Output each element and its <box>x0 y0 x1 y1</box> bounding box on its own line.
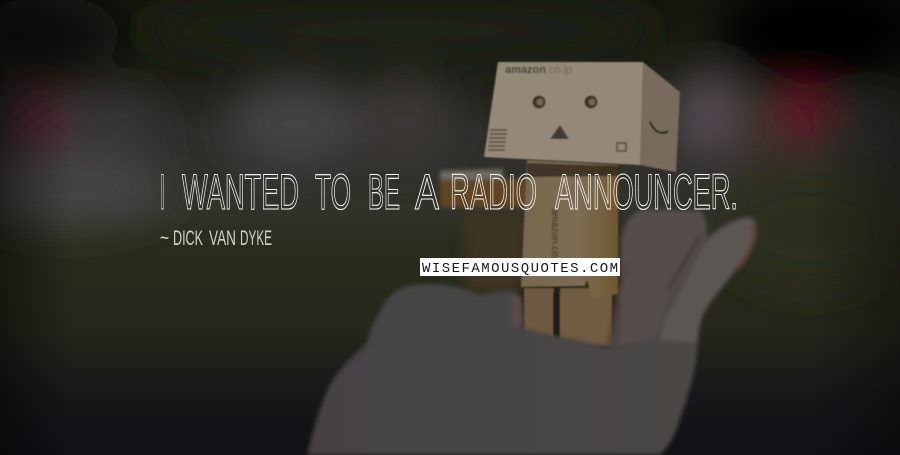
author: DYKE <box>240 227 272 250</box>
quote text: WANTED <box>182 164 299 220</box>
quote text: BE <box>368 164 400 220</box>
smile logo on side <box>650 122 668 133</box>
quote text: I <box>160 164 165 220</box>
robot arm <box>440 169 530 208</box>
author: VAN <box>209 227 236 250</box>
quote text: TO <box>315 164 351 220</box>
author: DICK <box>173 227 203 250</box>
quote text: A <box>415 164 439 220</box>
robot legs <box>524 288 612 346</box>
hand <box>307 209 756 455</box>
robot head <box>484 62 680 172</box>
author: ~ <box>160 227 169 250</box>
amazon logo on head: amazon.co.jp <box>505 64 572 76</box>
quote text: ANNOUNCER. <box>555 164 738 220</box>
robot mouth <box>550 125 569 139</box>
quote text: RADIO <box>450 164 537 220</box>
robot body print: amazon.co.jp <box>549 208 560 268</box>
robot eyes <box>532 96 598 108</box>
barcode <box>488 129 507 151</box>
robot body <box>521 160 618 298</box>
small mark <box>617 143 626 151</box>
watermark: WISEFAMOUSQUOTES.COM <box>422 261 618 277</box>
cardboard robot <box>440 62 680 298</box>
dark area behind body <box>465 212 570 320</box>
